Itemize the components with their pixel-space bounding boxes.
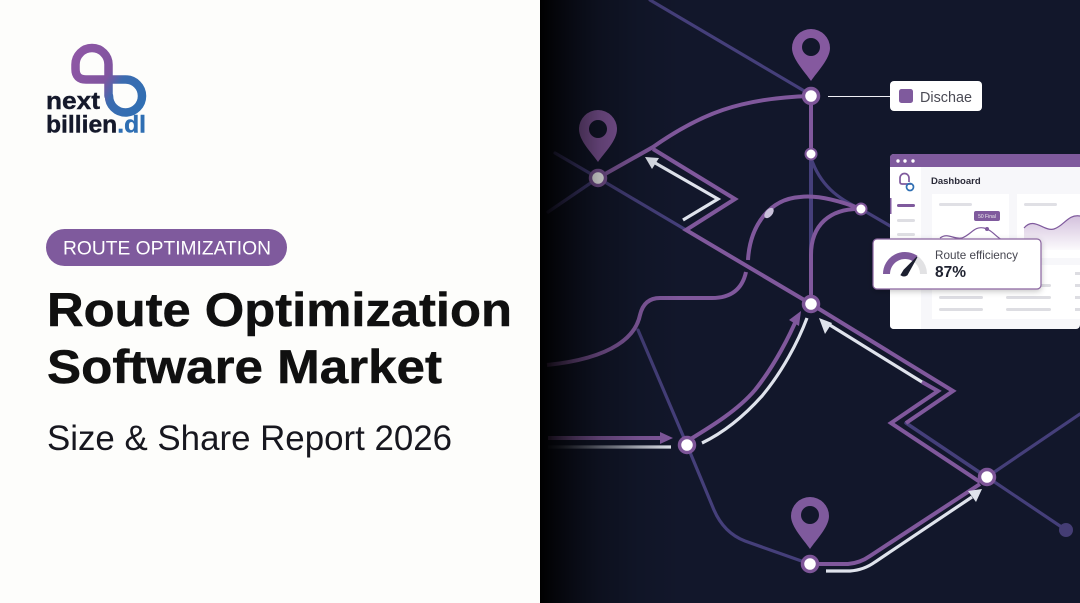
category pill: ROUTE OPTIMIZATION: [63, 238, 271, 260]
callout: Dischae label: Dischae: [920, 89, 972, 106]
panel: dark network map: [540, 0, 1080, 603]
callout: route efficiency card: [873, 239, 1041, 289]
title: Route Optimization: [47, 283, 512, 336]
chart card left: 50 Final: [978, 214, 996, 220]
logo: NextBillion.ai: [46, 48, 146, 138]
efficiency value: 87%: [935, 264, 966, 281]
network lines: blue secondary routes: [548, 0, 1080, 564]
dashboard title bar: [890, 154, 1080, 167]
callout: Dischae label: [828, 81, 982, 111]
efficiency label: Route efficiency: [935, 248, 1018, 262]
route nodes: [590, 88, 994, 572]
title: Software Market: [47, 340, 442, 393]
category pill: [46, 229, 287, 266]
logo wordmark: next: next: [46, 88, 100, 115]
waypoint ellipse: [762, 206, 776, 220]
dashboard heading: Dashboard: [931, 176, 981, 187]
chart card left: [932, 194, 1009, 258]
title: [47, 283, 512, 393]
chart card right: [1017, 194, 1080, 258]
icon: map pin top: [792, 29, 830, 81]
arrowheads: purple: [660, 311, 801, 444]
route end dot: [1059, 523, 1073, 537]
icon: infinity loop: [76, 48, 142, 112]
left edge fade: [540, 0, 680, 603]
subtitle: Size & Share Report 2026: [47, 419, 452, 458]
icon: map pin bottom: [791, 497, 829, 549]
icon: gauge: [886, 256, 924, 276]
arrowheads: white: [645, 157, 982, 502]
panel: dashboard window: [890, 154, 1080, 329]
panel: left white background: [0, 0, 540, 603]
table panel: [932, 265, 1080, 319]
arrows: white flow direction: [548, 160, 972, 571]
logo wordmark: billien.dl: billien.dl: [46, 112, 146, 138]
dashboard sidebar: [890, 167, 921, 329]
icon: map pin left: [579, 110, 617, 162]
network lines: purple main routes: [547, 96, 980, 564]
